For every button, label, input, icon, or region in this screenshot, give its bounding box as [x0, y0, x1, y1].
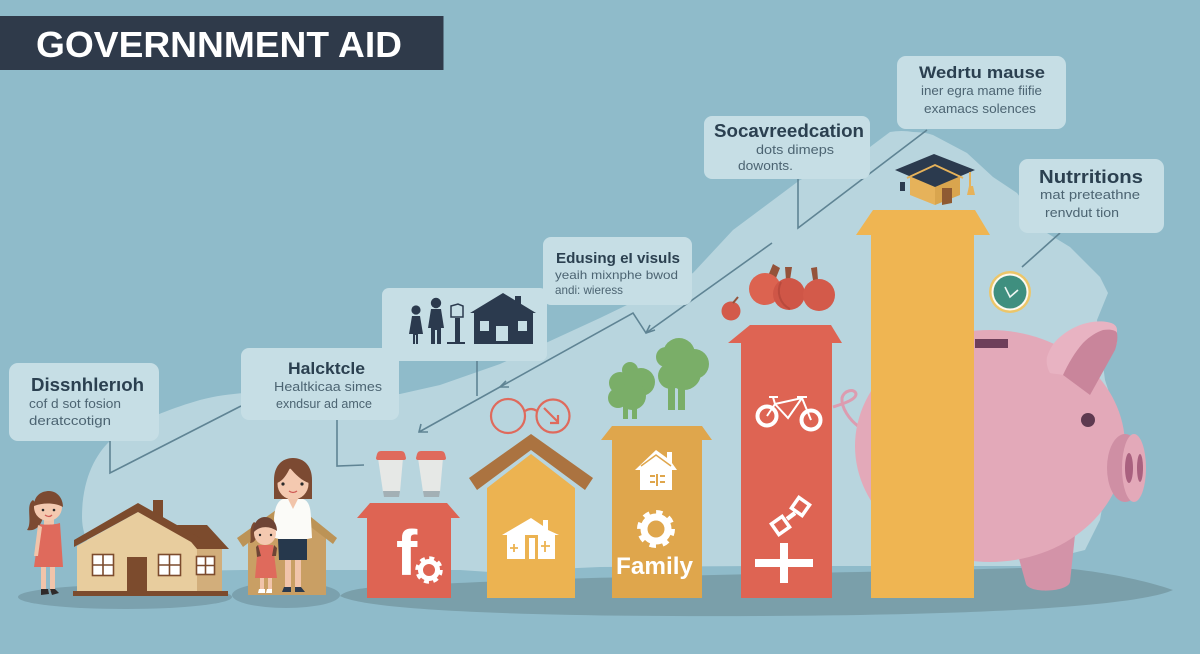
icon: plus [755, 543, 813, 583]
icon: graduation cap house [895, 154, 975, 205]
icon: apples [722, 264, 835, 320]
icon: clock [989, 271, 1031, 313]
callout: nutrition: renvdut tion [1045, 205, 1119, 220]
icon: f and gear: f [396, 517, 418, 589]
callout: welfare: Wedrtu mause [919, 63, 1045, 82]
callout: social education: Socavreedcation [714, 121, 864, 141]
bar 4: red [722, 264, 842, 598]
icon: f and gear [396, 517, 441, 589]
title: GOVERNNMENT AID [36, 24, 402, 65]
bar 2: orange house [469, 399, 593, 598]
connector lines and arrows [110, 130, 1060, 473]
figure: mother and child with house [237, 458, 337, 595]
callout: welfare [897, 56, 1066, 129]
bar 1: red [357, 451, 460, 598]
callout: education visuals: andi: wieress [555, 283, 623, 297]
callout: education visuals [543, 237, 692, 305]
ground shadows [18, 567, 1173, 616]
label: family: Family [616, 553, 694, 580]
icon: bicycle [758, 397, 820, 430]
callout: disability: deratccotign [29, 413, 111, 428]
callout: education visuals: yeaih mixnphe bwod [555, 268, 678, 282]
callout: disability: Dissnhlerıoh [31, 375, 144, 395]
icon: white house [502, 518, 559, 559]
callout: healthcare [241, 348, 399, 420]
callout: welfare: examacs solences [924, 101, 1037, 116]
callout: social education: dots dimeps [756, 142, 835, 157]
icon: chain link [771, 497, 810, 535]
icon: glasses [491, 399, 570, 433]
icon: trees [608, 338, 709, 419]
icon: coffee cups [376, 451, 446, 497]
icon: gear [639, 512, 673, 546]
callout: nutrition: mat preteathne [1040, 187, 1140, 202]
callout: social education: dowonts. [738, 158, 793, 173]
icon: house [73, 500, 229, 596]
callout: welfare: iner egra mame fiifie [921, 83, 1042, 98]
title [0, 16, 444, 70]
icon: white house [635, 450, 677, 490]
callout: disability: cof d sot fosion [29, 396, 121, 411]
callout: healthcare: Halcktcle [288, 359, 365, 378]
callout: family icons [382, 288, 547, 361]
figure: girl [27, 491, 63, 595]
icon: pig tail [833, 391, 858, 426]
bar 3: amber family [601, 338, 712, 598]
callout: social education [704, 116, 870, 179]
piggy bank [855, 321, 1146, 591]
bar 5: yellow [856, 154, 990, 598]
callout: education visuals: Edusing eI visuls [556, 250, 680, 267]
callout: nutrition [1019, 159, 1164, 233]
callout: healthcare: Healtkicaa simes [274, 379, 383, 394]
callout: nutrition: Nutrritions [1039, 167, 1143, 187]
callout: healthcare: exndsur ad amce [276, 396, 372, 411]
callout: disability [9, 363, 159, 441]
